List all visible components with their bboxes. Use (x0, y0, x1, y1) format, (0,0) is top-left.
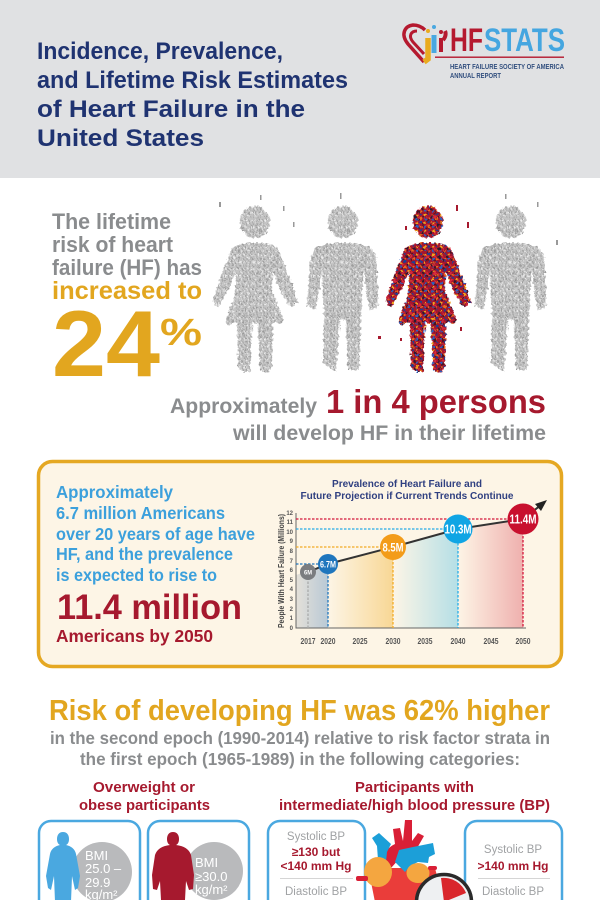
prevalence text (56, 482, 255, 585)
prevalence text: over 20 years of age have (56, 524, 255, 544)
title: Incidence, Prevalence, (37, 38, 283, 65)
icon: heart logo (404, 25, 446, 62)
BMI label: ≥30.0 (195, 869, 227, 884)
y axis ticks: 11 (287, 520, 294, 526)
title (37, 38, 348, 152)
y axis ticks (286, 511, 294, 632)
y axis ticks: 9 (290, 539, 294, 545)
x axis labels: 2020 (320, 637, 336, 646)
panel: high BP: Diastolic BP (482, 886, 544, 898)
prevalence text: HF, and the prevalence (56, 544, 233, 564)
data bubbles: 8.5M (382, 540, 404, 554)
data bubbles: 11.4M (510, 512, 536, 526)
panel: intermediate BP (268, 821, 365, 900)
1 in 4 statement: will develop HF in their lifetime (232, 422, 546, 445)
axes (296, 513, 526, 628)
x axis labels: 2025 (352, 637, 368, 646)
x axis labels: 2035 (418, 637, 433, 646)
panel: intermediate BP: ≥130 but (292, 845, 340, 859)
line chart (277, 478, 547, 646)
guide lines (296, 519, 523, 628)
chart title: Prevalence of Heart Failure and (332, 478, 482, 490)
y axis ticks: 1 (290, 616, 294, 622)
BMI label: 25.0 – (85, 861, 122, 876)
panel: high BP (465, 821, 562, 900)
icon: blue person (46, 832, 80, 900)
title: and Lifetime Risk Estimates (37, 67, 348, 94)
heading: overweight: Overweight or (93, 780, 195, 796)
1 in 4 statement: Approximately (170, 395, 317, 418)
icon: pressure gauge (416, 874, 472, 900)
1 in 4 statement (170, 383, 546, 445)
lifetime risk text: % (160, 312, 202, 354)
BMI label (195, 855, 228, 897)
y axis ticks: 4 (290, 587, 294, 593)
BMI label: BMI (85, 848, 108, 863)
title: United States (37, 125, 204, 152)
lifetime risk text: increased to (52, 277, 202, 305)
panel: intermediate BP: Diastolic BP (285, 886, 347, 898)
prevalence text: Approximately (56, 482, 173, 502)
heading: overweight: obese participants (79, 798, 210, 814)
x axis labels (300, 637, 531, 646)
icon: red person (152, 832, 194, 900)
figure: woman gray (212, 206, 298, 373)
data bubbles: 6.7M (320, 560, 336, 570)
data bubbles (300, 504, 538, 580)
BMI label: BMI (195, 855, 218, 870)
panel: high BP: Systolic BP (484, 844, 542, 856)
big number: 11.4 million (57, 588, 242, 627)
BMI label (85, 848, 122, 900)
logo wordmark: HF (450, 22, 483, 58)
heading: overweight (79, 780, 210, 814)
subheading (50, 728, 550, 769)
figure: man gray (307, 206, 378, 372)
figure: man gray right (475, 206, 546, 372)
lifetime risk text: 24 (52, 291, 160, 396)
y axis ticks: 3 (290, 597, 294, 603)
data bubbles: 10.3M (444, 522, 472, 536)
x axis labels: 2040 (450, 637, 466, 646)
y axis ticks: 10 (286, 530, 294, 536)
y axis ticks: 12 (286, 511, 294, 517)
y axis ticks: 2 (290, 607, 294, 613)
y axis label: People With Heart Failure (Millions) (277, 514, 286, 628)
figure: woman coloured (385, 206, 471, 373)
icon: anatomical heart (356, 820, 438, 900)
prevalence text: 6.7 million Americans (56, 503, 225, 523)
header band (0, 0, 600, 178)
y axis ticks: 6 (290, 568, 294, 574)
chart areas (296, 519, 523, 628)
y axis ticks: 0 (290, 626, 294, 632)
logo wordmark (435, 22, 565, 80)
x axis labels: 2050 (516, 637, 531, 646)
logo wordmark: STATS (484, 22, 565, 58)
heading: blood pressure (279, 780, 550, 814)
chart title: Future Projection if Current Trends Continue (300, 490, 514, 502)
heading: risk: Risk of developing HF was 62% higher (49, 695, 550, 727)
panel: high BP: >140 mm Hg (477, 859, 549, 873)
panel: intermediate BP: Systolic BP (287, 831, 345, 843)
figures: four people made of crowds (212, 193, 558, 373)
BMI label: kg/m² (195, 882, 228, 897)
lifetime risk text (52, 209, 202, 396)
stray specks (219, 193, 558, 245)
x axis labels: 2030 (386, 637, 401, 646)
data bubbles: 6M (304, 570, 312, 576)
subheading: the first epoch (1965-1989) in the following categories: (80, 749, 520, 769)
prevalence text: is expected to rise to (56, 565, 217, 585)
panel: intermediate BP: <140 mm Hg (280, 859, 352, 873)
y axis ticks: 5 (290, 578, 294, 584)
lifetime risk text: failure (HF) has (52, 255, 202, 280)
x axis labels: 2017 (300, 637, 316, 646)
trend line (308, 505, 541, 572)
logo wordmark: ANNUAL REPORT (450, 73, 502, 80)
lifetime risk text: The lifetime (52, 209, 171, 234)
title: of Heart Failure in the (37, 96, 305, 123)
BMI label: 29.9 (85, 875, 110, 890)
chart title (300, 478, 514, 502)
y axis ticks: 7 (290, 559, 294, 565)
heading: blood pressure: intermediate/high blood pressure (BP) (279, 798, 550, 814)
logo wordmark: HEART FAILURE SOCIETY OF AMERICA (450, 64, 564, 71)
subheading: in the second epoch (1990-2014) relative to risk factor strata in (50, 728, 550, 748)
heading: blood pressure: Participants with (355, 780, 474, 796)
lifetime risk text: risk of heart (52, 232, 174, 257)
prevalence caption: Americans by 2050 (56, 626, 213, 646)
1 in 4 statement: 1 in 4 persons (326, 383, 546, 420)
y axis ticks: 8 (290, 549, 294, 555)
x axis labels: 2045 (484, 637, 499, 646)
panel: prevalence (38, 462, 562, 666)
panel: BMI 30+ (148, 821, 249, 900)
logo: HF Stats (404, 22, 565, 80)
arrow head (535, 500, 547, 511)
panel: BMI 25-29.9 (39, 821, 140, 900)
